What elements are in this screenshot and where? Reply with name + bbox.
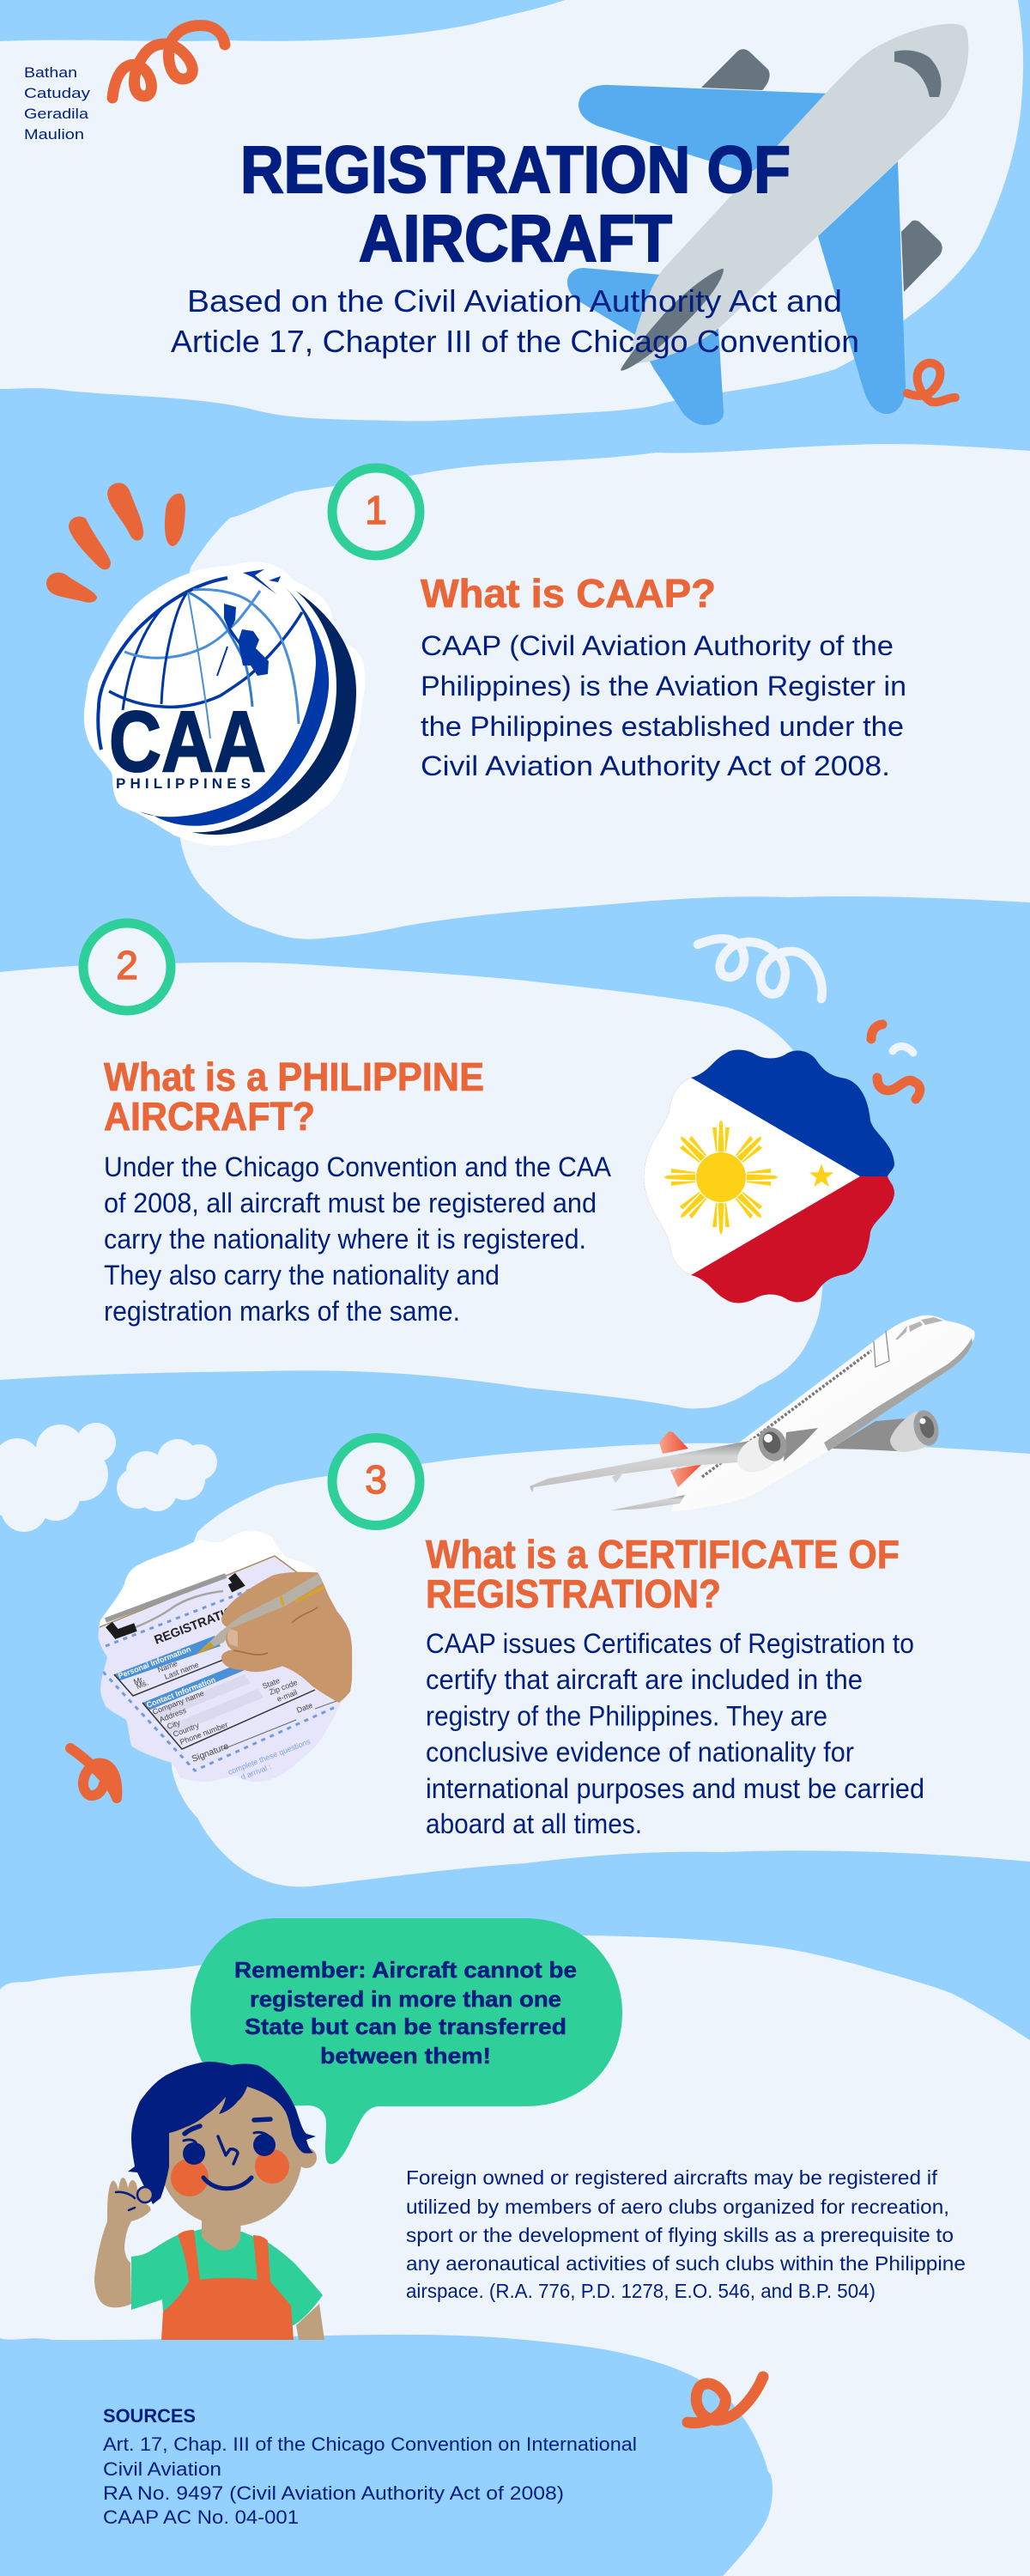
icon: orange and white marks [871,1024,920,1099]
speech bubble: between them! [320,2043,491,2069]
foreign aircraft note: any aeronautical activities of such clubs within the Philippine [406,2252,966,2275]
icon: orange squiggle near wing [907,363,955,402]
photo: hand filling registration form: Mr. [132,1674,145,1686]
section 1 text: Civil Aviation Authority Act of 2008. [421,750,890,781]
flag badge: Philippines [644,1049,894,1303]
photo: hand filling registration form: Date [295,1701,313,1715]
title [240,133,791,276]
number badge 2 [83,923,171,1011]
section 3 heading: REGISTRATION? [426,1571,721,1616]
section 1 text [421,630,906,781]
icon: orange squiggle section 3 [70,1748,117,1798]
section 1 heading: What is CAAP? [421,571,716,616]
illustration: realistic airplane [530,1315,975,1511]
icon: orange squiggle bottom [688,2377,763,2423]
icon: orange squiggle top left [112,26,225,98]
panel: section 2 background [0,963,825,1408]
photo: hand filling registration form: Ms. [135,1678,149,1691]
section 3 heading: What is a CERTIFICATE OF [426,1532,900,1577]
section 3 heading [426,1532,900,1616]
author names: Maulion [24,126,84,143]
panel: section 3 background [171,1443,1030,1886]
foreign aircraft note: utilized by members of aero clubs organized for recreation, [406,2196,949,2218]
photo: hand filling registration form: e-mail [276,1688,299,1704]
logo: CAA Philippines: CAA [109,694,266,790]
section 2 text [104,1151,612,1327]
panel: section 1 background [176,444,1030,939]
icon: clouds [0,1423,217,1532]
section 3 text: CAAP issues Certificates of Registration to [426,1628,914,1659]
speech bubble: State but can be transferred [245,2014,566,2039]
subtitle [171,283,859,359]
author names [24,64,91,143]
section 3 text: aboard at all times. [426,1808,642,1839]
section 2 text: They also carry the nationality and [104,1260,500,1291]
photo: hand filling registration form: Contact Information [145,1675,217,1710]
foreign aircraft note: Foreign owned or registered aircrafts may be registered if [406,2166,938,2189]
foreign aircraft note [406,2166,966,2302]
logo: CAA Philippines [84,562,365,846]
photo: hand filling registration form: Country [172,1721,201,1739]
subtitle: Article 17, Chapter III of the Chicago Convention [171,324,859,359]
photo: hand filling registration form: Company name [151,1689,205,1716]
author names: Bathan [24,64,77,81]
foreign aircraft note: sport or the development of flying skills as a prerequisite to [406,2224,954,2246]
section 2 text: of 2008, all aircraft must be registered and [104,1188,597,1218]
sources: CAAP AC No. 04-001 [103,2506,299,2528]
icon: white squiggle [698,939,822,999]
section 2 heading [104,1054,484,1139]
panel: header background [0,0,1023,421]
photo: hand filling registration form: complete these questions [227,1737,312,1777]
author names: Geradila [24,106,89,122]
section 3 text: certify that aircraft are included in the [426,1664,863,1695]
logo: CAA Philippines: PHILIPPINES [116,775,251,792]
photo: hand filling registration form: Signature [191,1741,230,1765]
title: AIRCRAFT [359,202,672,276]
section 1 text: the Philippines established under the [421,711,904,742]
sources: SOURCES [103,2405,196,2427]
sources: Civil Aviation [103,2458,221,2480]
panel: lower background [0,1935,1030,2576]
speech bubble: Remember: Aircraft cannot be [234,1957,577,1983]
photo: hand filling registration form: Zip code [268,1678,299,1697]
section 2 heading: What is a PHILIPPINE [104,1054,484,1099]
number badge 3: 3 [365,1457,387,1502]
photo: hand filling registration form: State [261,1676,281,1691]
icon: large cartoon airplane [567,24,968,425]
section 2 text: Under the Chicago Convention and the CAA [104,1151,612,1182]
author names: Catuday [24,85,91,101]
section 3 text: international purposes and must be carried [426,1773,924,1804]
section 1 text: CAAP (Civil Aviation Authority of the [421,630,894,661]
number badge 1: 1 [365,488,387,532]
photo: hand filling registration form [98,1531,353,1782]
number badge 1 [332,468,420,556]
title: REGISTRATION OF [240,133,791,207]
number badge 2: 2 [116,943,138,987]
photo: hand filling registration form: Personal Information [117,1644,192,1680]
photo: hand filling registration form: City [166,1718,182,1731]
foreign aircraft note: airspace. (R.A. 776, P.D. 1278, E.O. 546, and B.P. 504) [406,2280,876,2302]
section 2 text: carry the nationality where it is registered. [104,1224,586,1255]
photo: hand filling registration form: Name [156,1659,179,1674]
subtitle: Based on the Civil Aviation Authority Act and [187,283,842,319]
photo: hand filling registration form: REGISTRATION F [153,1597,255,1648]
photo: hand filling registration form: Phone number [179,1720,229,1747]
icon: orange burst marks [46,483,185,603]
photo: hand filling registration form: Address [158,1706,188,1724]
illustration: child character [94,2062,324,2340]
photo: hand filling registration form: d arrival : [239,1762,272,1782]
speech bubble: registered in more than one [250,1986,561,2012]
section 3 text: conclusive evidence of nationality for [426,1736,854,1767]
speech bubble [191,1918,622,2164]
photo: hand filling registration form: Last name [163,1660,200,1681]
sources [103,2405,637,2528]
section 2 text: registration marks of the same. [104,1296,460,1327]
section 3 text [426,1628,924,1839]
section 2 heading: AIRCRAFT? [104,1094,315,1139]
section 3 text: registry of the Philippines. They are [426,1700,827,1731]
sources: Art. 17, Chap. III of the Chicago Convention on International [103,2433,637,2455]
section 1 text: Philippines) is the Aviation Register in [421,671,906,702]
sources: RA No. 9497 (Civil Aviation Authority Act of 2008) [103,2482,564,2504]
number badge 3 [332,1437,420,1525]
